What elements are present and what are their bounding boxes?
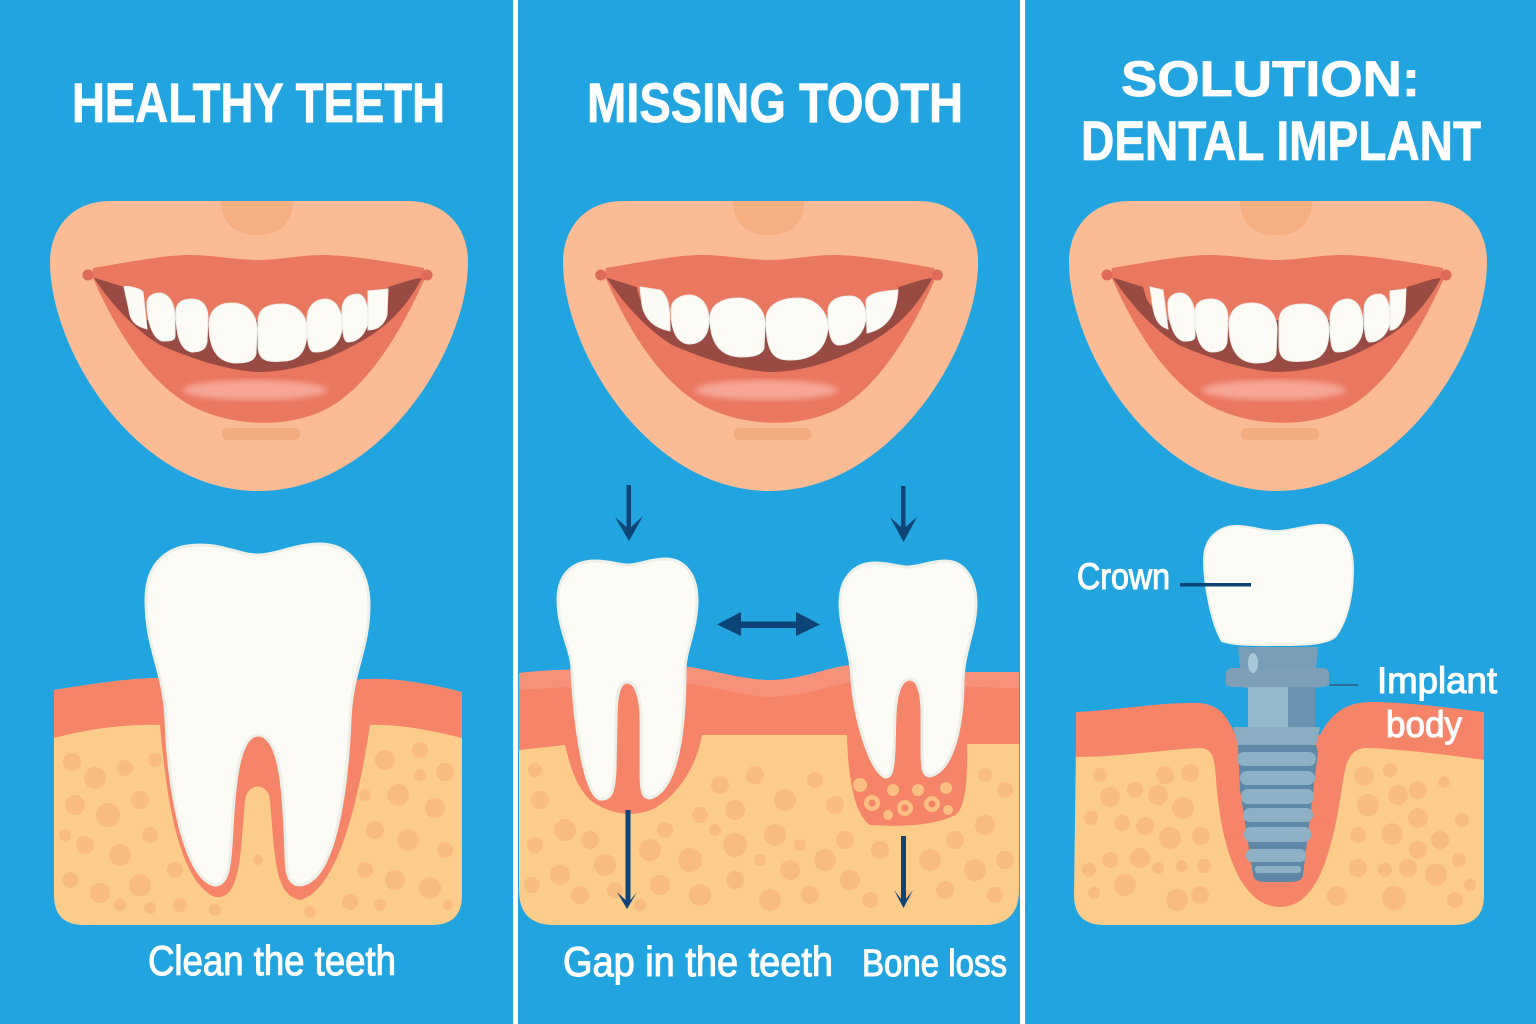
heading: healthy teeth: HEALTHY TEETH — [72, 71, 445, 134]
heading: solution dental implant: SOLUTION: — [1121, 51, 1420, 107]
label: crown: Crown — [1077, 556, 1170, 597]
label: implant body: body — [1386, 704, 1462, 745]
gum and bone: implant — [1074, 702, 1484, 925]
label: crown — [1077, 556, 1251, 597]
heading: missing tooth: MISSING TOOTH — [587, 71, 963, 134]
caption: clean the teeth: Clean the teeth — [148, 937, 396, 984]
arrow: down right top — [890, 486, 917, 542]
arrow: down left bottom — [617, 810, 637, 909]
panel: missing tooth — [519, 71, 1019, 985]
label: implant body — [1330, 660, 1498, 745]
implant screw — [1226, 647, 1329, 882]
heading: solution dental implant — [1081, 51, 1481, 172]
tooth: right of gap — [840, 561, 976, 777]
tooth: left of gap — [558, 559, 697, 799]
caption: bone loss: Bone loss — [862, 943, 1007, 985]
smile: healthy — [50, 201, 468, 491]
label: implant body: Implant — [1377, 660, 1498, 701]
arrow: down left top — [615, 485, 643, 541]
tooth: healthy — [146, 544, 369, 885]
arrow: double horizontal — [717, 612, 820, 636]
caption: gap in the teeth: Gap in the teeth — [563, 938, 833, 985]
panel: healthy teeth — [50, 71, 468, 984]
gum and bone: missing tooth — [519, 665, 1019, 925]
smile: missing tooth — [563, 201, 978, 491]
smile: restored — [1069, 201, 1487, 491]
gum and bone: healthy — [54, 678, 462, 925]
crown — [1204, 525, 1353, 645]
arrow: down right bottom — [894, 836, 913, 908]
panel: dental implant — [1069, 51, 1498, 925]
